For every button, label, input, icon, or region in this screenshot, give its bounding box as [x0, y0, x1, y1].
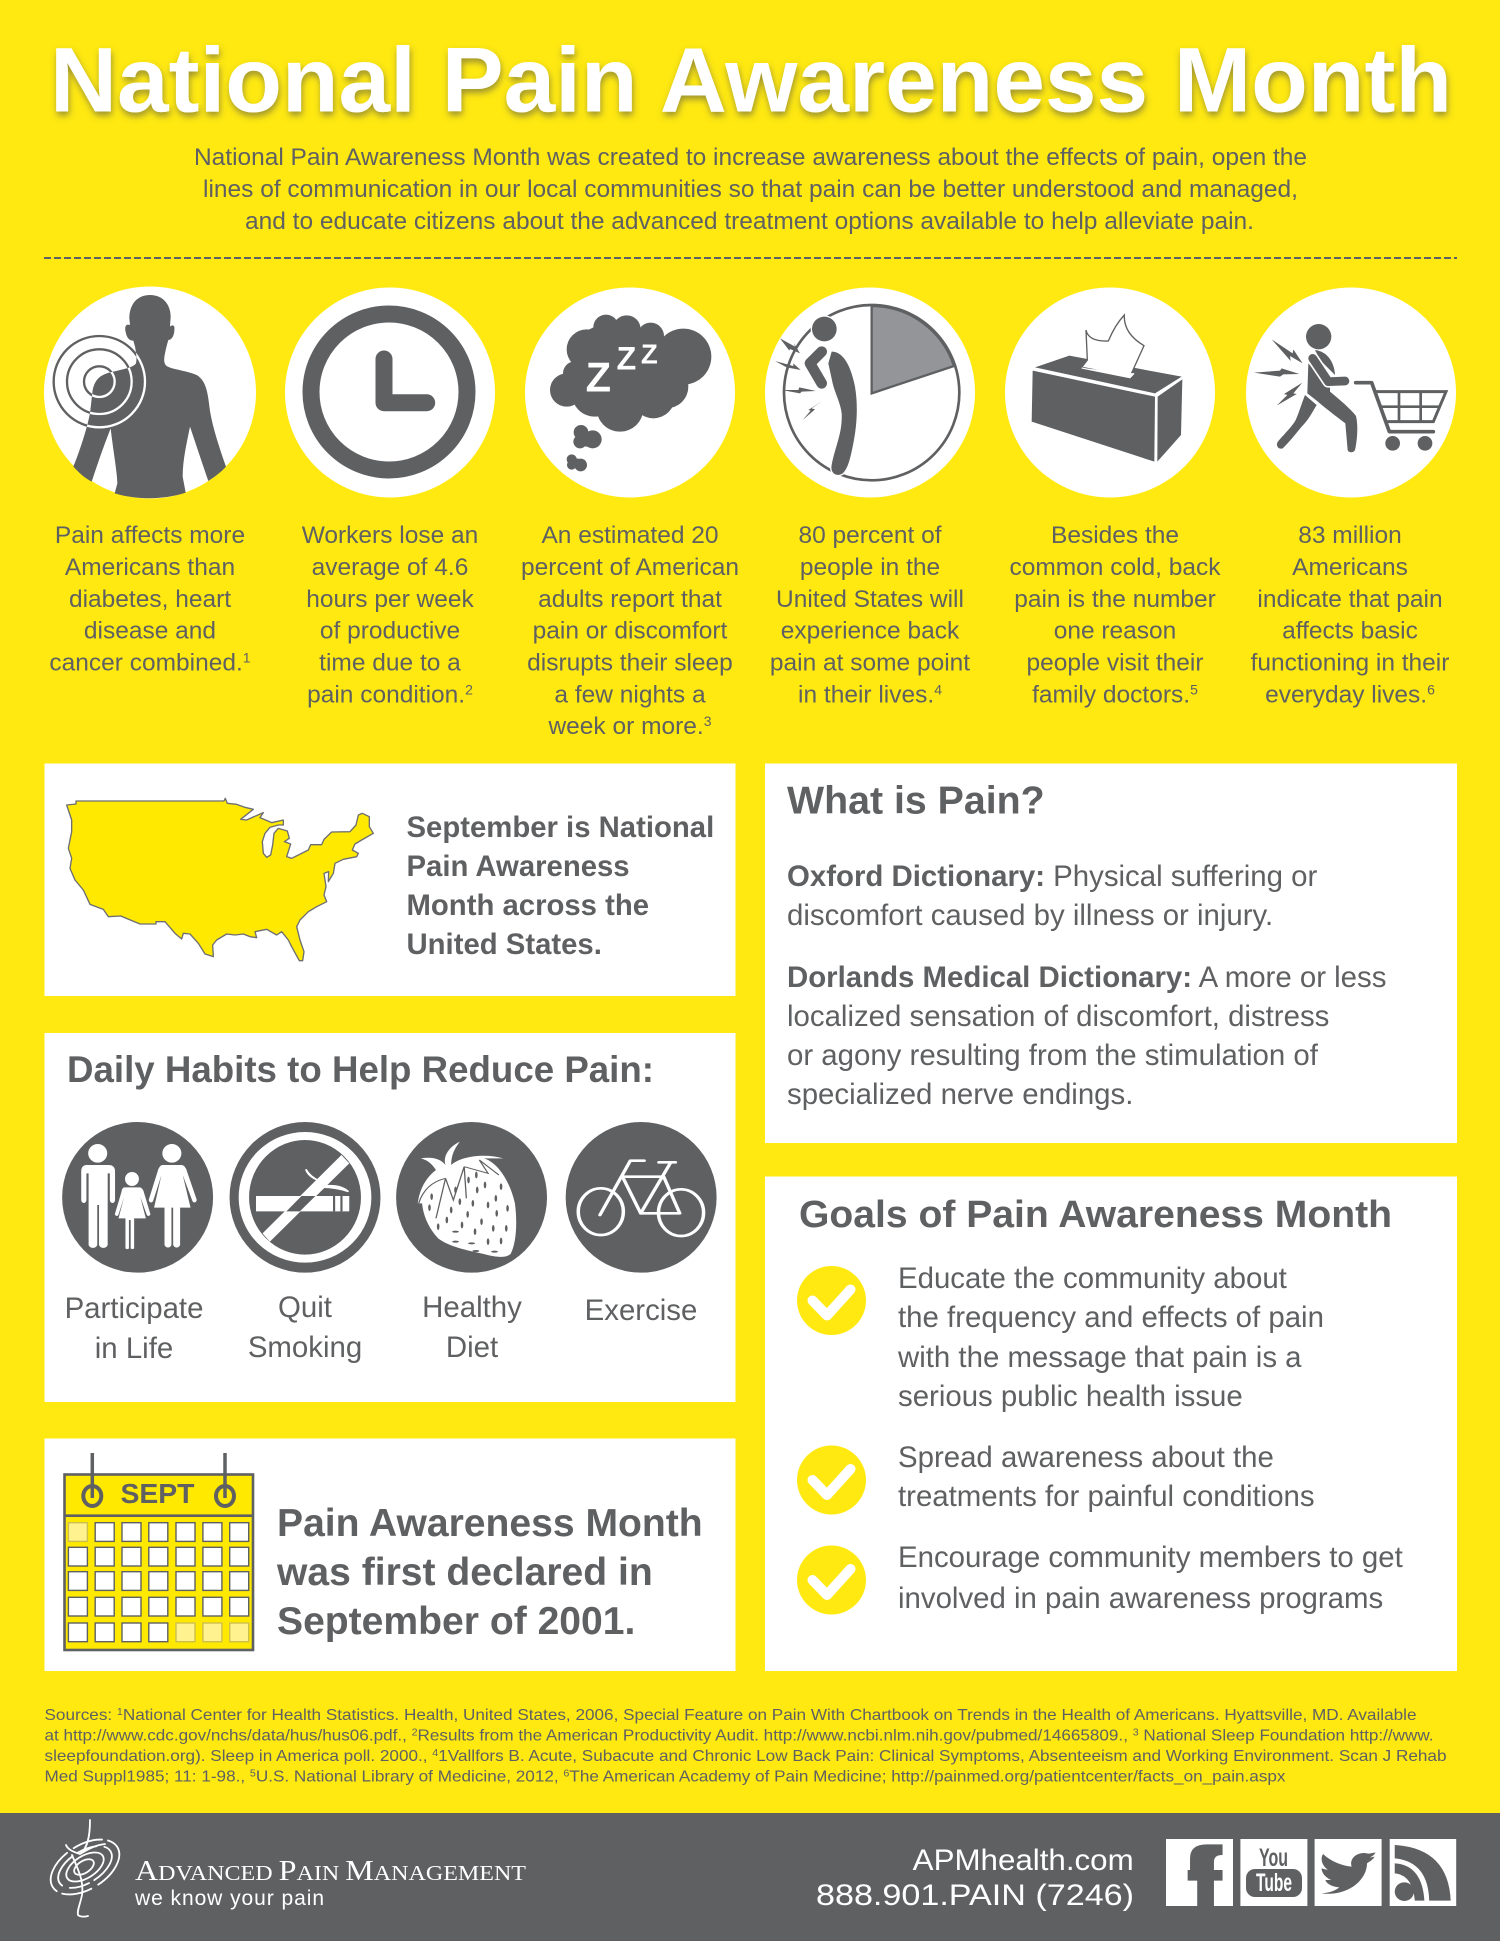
sources: National Sleep Foundation http://www.: [1139, 1728, 1434, 1745]
sources: [44, 1707, 1447, 1786]
caption 4: 4: [934, 681, 942, 697]
caption 1: Pain affects more: [55, 522, 245, 549]
caption 6: functioning in their: [1251, 650, 1449, 676]
sources: 1Vallfors B. Acute, Subacute and Chronic Low Back Pain: Clinical Symptoms, Absenteeism and Working Environment. Scan J Rehab: [438, 1748, 1447, 1765]
panel: daily habits: Exercise: [585, 1294, 697, 1327]
panel: daily habits: Smoking: [248, 1331, 362, 1364]
caption 3: 3: [704, 713, 712, 729]
caption 4: 80 percent of: [798, 522, 942, 549]
caption 3: pain or discomfort: [533, 618, 728, 645]
caption 6: 6: [1427, 681, 1435, 697]
caption 3: week or more.: [547, 713, 712, 740]
calendar text: September of 2001.: [277, 1600, 635, 1643]
caption 6: Americans: [1292, 554, 1408, 581]
caption 3: disrupts their sleep: [527, 650, 733, 676]
intro text: [194, 144, 1307, 235]
icon: body with pain target: [44, 286, 256, 498]
caption 3: percent of American: [521, 554, 739, 581]
goal text 1: the frequency and effects of pain: [898, 1301, 1324, 1334]
icon: no smoking: [230, 1122, 380, 1273]
sources: Results from the American Productivity Audit. http://www.ncbi.nlm.nih.gov/pubmed/14665809.,: [418, 1728, 1133, 1745]
icon: tissue box: [1005, 288, 1215, 498]
icon: YouTube: You: [1259, 1844, 1288, 1872]
icon: sleep thought cloud: Z: [641, 338, 658, 369]
caption 1: 1: [243, 650, 251, 666]
icon: shopper with cart: [1246, 288, 1456, 498]
goal text 3: involved in pain awareness programs: [898, 1582, 1383, 1615]
habit labels: Participate: [65, 1292, 203, 1325]
goal text 1: serious public health issue: [898, 1380, 1243, 1413]
icon: family: [62, 1122, 213, 1273]
panel: September map: [44, 764, 736, 996]
heading: goals: Goals of Pain Awareness Month: [799, 1194, 1392, 1236]
panel: daily habits: [44, 1033, 736, 1402]
phone: 888.901.PAIN (7246): [816, 1879, 1134, 1912]
panel: what is pain: [765, 764, 1457, 1143]
icon: sleep thought cloud: Z: [586, 354, 611, 401]
caption 3: adults report that: [538, 586, 722, 613]
map of the United States: [67, 798, 373, 961]
caption 1: cancer combined.: [49, 650, 251, 676]
captions: [49, 522, 1449, 740]
goal text 1: Educate the community about: [898, 1262, 1287, 1295]
caption 2: Workers lose an: [302, 522, 478, 549]
icon: September calendar: SEPT: [120, 1478, 194, 1509]
logo wordmark: ADVANCED PAIN MANAGEMENT: [135, 1856, 526, 1887]
icon: check 2: [797, 1446, 866, 1514]
definition: Dorlands: localized sensation of discomfort, distress: [787, 1000, 1329, 1033]
caption 2: 2: [465, 681, 473, 697]
panel: calendar: [44, 1438, 736, 1671]
caption 5: Besides the: [1051, 522, 1179, 549]
icon: September calendar: [64, 1453, 253, 1650]
habit labels: in Life: [95, 1332, 173, 1365]
icon: Twitter: [1315, 1839, 1382, 1906]
intro text: lines of communication in our local communities so that pain can be better understood and managed,: [203, 176, 1298, 203]
icon: sleep thought cloud: [525, 288, 735, 498]
map caption: September is National: [406, 811, 714, 844]
caption 1: Americans than: [65, 554, 235, 581]
heading: daily habits: Daily Habits to Help Reduce Pain:: [67, 1049, 654, 1090]
map caption: United States.: [406, 928, 602, 961]
sources: The American Academy of Pain Medicine; http://painmed.org/patientcenter/facts_on_pain.aspx: [569, 1769, 1286, 1786]
sources: 4: [432, 1748, 439, 1759]
icon: YouTube: Tube: [1256, 1869, 1292, 1897]
caption 6: 83 million: [1298, 522, 1402, 549]
caption 6: indicate that pain: [1257, 586, 1443, 613]
caption 2: of productive: [320, 618, 460, 645]
caption 1: disease and: [84, 618, 216, 645]
goal text 2: Spread awareness about the: [898, 1441, 1274, 1474]
definition: Oxford: Oxford Dictionary: Physical suffering or: [787, 860, 1317, 893]
website: APMhealth.com: [913, 1844, 1134, 1877]
title: National Pain Awareness Month: [50, 30, 1452, 132]
caption 4: experience back: [781, 618, 960, 645]
caption 4: in their lives.: [798, 681, 942, 708]
definition: Oxford: discomfort caused by illness or injury.: [787, 899, 1273, 932]
calendar text: was first declared in: [276, 1551, 653, 1594]
caption 1: diabetes, heart: [69, 586, 231, 613]
caption 2: pain condition.: [307, 681, 473, 708]
panel: daily habits: Healthy: [422, 1291, 522, 1324]
map caption: Month across the: [406, 889, 649, 922]
caption 5: 5: [1190, 681, 1198, 697]
caption 2: average of 4.6: [312, 554, 468, 581]
icon: YouTube: [1240, 1839, 1307, 1906]
sources: 5: [250, 1769, 256, 1780]
sources: 6: [563, 1769, 570, 1780]
caption 5: family doctors.: [1032, 681, 1198, 708]
icon: RSS: [1390, 1839, 1456, 1906]
icon: bicycle: [566, 1122, 717, 1273]
icon: clock: [285, 288, 495, 498]
icon: back pain pie chart: [765, 288, 975, 498]
caption 3: a few nights a: [554, 681, 706, 708]
calendar text: Pain Awareness Month: [277, 1502, 703, 1545]
caption 4: United States will: [776, 586, 964, 613]
definition: Dorlands: Dorlands Medical Dictionary: A more or less: [787, 961, 1386, 994]
sources: Sources:: [44, 1707, 108, 1724]
sources: at http://www.cdc.gov/nchs/data/hus/hus06.pdf.,: [44, 1728, 383, 1745]
caption 2: time due to a: [319, 650, 461, 676]
caption 5: common cold, back: [1009, 554, 1221, 581]
icon: check 3: [797, 1546, 866, 1614]
caption 5: one reason: [1054, 618, 1176, 645]
caption 4: people in the: [800, 554, 940, 581]
goal text 3: Encourage community members to get: [898, 1541, 1403, 1574]
intro text: and to educate citizens about the advanced treatment options available to help alleviate pain.: [245, 208, 1254, 235]
icon: Facebook: [1166, 1839, 1233, 1906]
goal text 2: treatments for painful conditions: [898, 1480, 1315, 1513]
caption 6: everyday lives.: [1265, 681, 1435, 708]
map caption: Pain Awareness: [406, 850, 630, 883]
caption 6: affects basic: [1282, 618, 1418, 645]
icon: sleep thought cloud: Z: [616, 340, 636, 376]
panel: goals: [765, 1176, 1457, 1671]
sources: National Center for Health Statistics. Health, United States, 2006, Special Feature on Pain With Chartbook on Trends in the Health of Americans. Hyattsville, MD. Available: [123, 1707, 1417, 1724]
sources: Med Suppl1985; 11: 1-98.,: [44, 1769, 232, 1786]
footer band: [0, 1813, 1500, 1941]
panel: daily habits: Diet: [446, 1331, 498, 1364]
logo tagline: we know your pain: [134, 1887, 324, 1910]
panel: daily habits: Quit: [278, 1291, 332, 1324]
intro text: National Pain Awareness Month was created to increase awareness about the effects of pain, open the: [194, 144, 1307, 171]
heading: what is pain: What is Pain?: [787, 778, 1045, 822]
definition: Dorlands: or agony resulting from the stimulation of: [787, 1039, 1319, 1072]
icon: strawberry: [396, 1122, 547, 1273]
icon: check 1: [797, 1266, 866, 1335]
logo mark: [41, 1820, 129, 1917]
goal text 1: with the message that pain is a: [897, 1341, 1302, 1374]
caption 4: pain at some point: [770, 650, 970, 676]
caption 5: pain is the number: [1014, 586, 1216, 613]
definition: Dorlands: specialized nerve endings.: [787, 1078, 1133, 1111]
caption 2: hours per week: [306, 586, 474, 613]
sources: 2: [412, 1728, 418, 1739]
caption 5: people visit their: [1026, 650, 1204, 676]
sources: U.S. National Library of Medicine, 2012,: [256, 1769, 563, 1786]
sources: 1: [117, 1707, 123, 1718]
sources: sleepfoundation.org). Sleep in America poll. 2000.,: [44, 1748, 402, 1765]
caption 3: An estimated 20: [541, 522, 719, 549]
sources: 3: [1133, 1728, 1139, 1739]
